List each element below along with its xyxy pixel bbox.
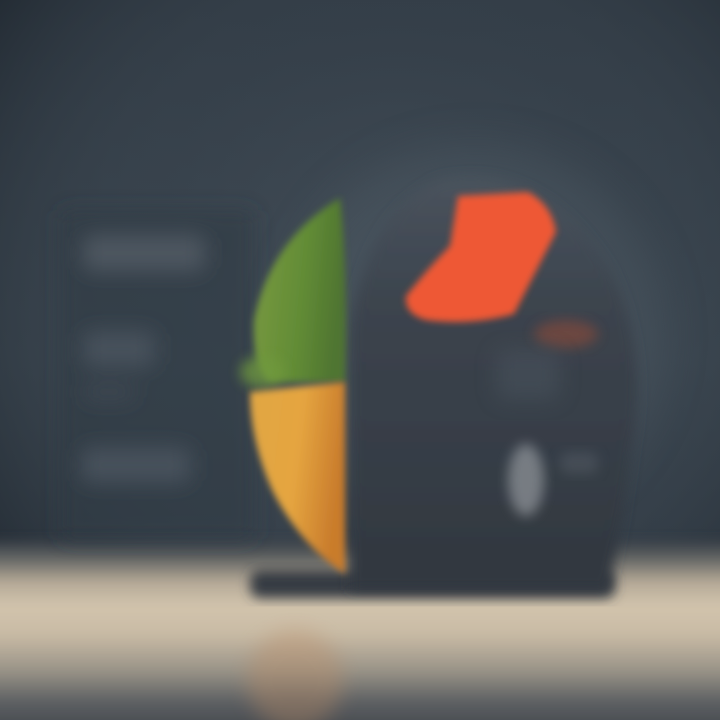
table surface xyxy=(0,542,720,720)
orange carrot half xyxy=(250,382,345,574)
base shadow xyxy=(250,570,615,598)
blurred label line three xyxy=(82,448,190,482)
disc body xyxy=(350,177,638,590)
red slice xyxy=(406,192,556,322)
blurred label line one xyxy=(84,332,154,366)
leaf collar xyxy=(240,356,284,388)
green leaf half xyxy=(254,198,346,382)
blurred label line two xyxy=(84,384,134,400)
small red mark xyxy=(534,320,598,348)
pie chart disc xyxy=(285,145,665,590)
pale glyph tail xyxy=(560,452,598,474)
pale glyph xyxy=(508,444,544,516)
dim mark xyxy=(496,350,560,400)
blurred text panel on left xyxy=(60,210,255,540)
panel backing xyxy=(60,210,255,540)
reflection on table xyxy=(247,630,343,720)
blurred heading line xyxy=(84,236,204,270)
disc halo xyxy=(285,145,665,525)
